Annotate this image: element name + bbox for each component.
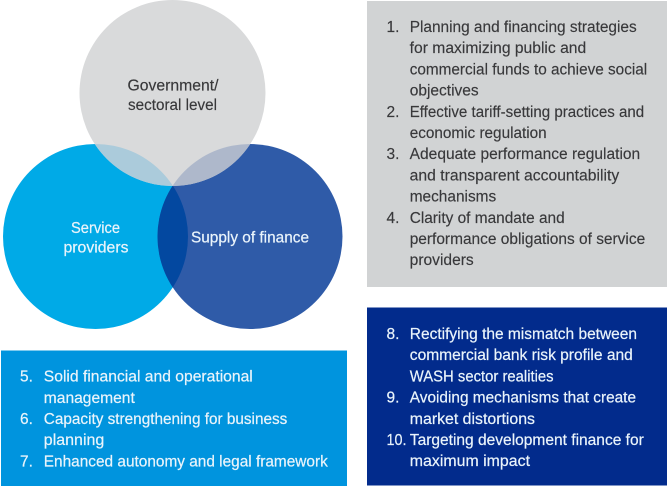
list: items 8 to 10: 10. [386,432,406,449]
list: items 8 to 10: Rectifying the mismatch between [410,326,637,343]
list: items 8 to 10: market distortions [410,411,535,428]
list: items 5 to 7: 5. [20,368,33,386]
panel: government actions [367,1,667,287]
list: items 1 to 4: Clarity of mandate and [410,210,565,227]
list: items 8 to 10: Avoiding mechanisms that create [410,390,636,407]
list: items 1 to 4: providers [410,252,474,269]
list: items 1 to 4: Adequate performance regulation [410,146,640,163]
list: items 8 to 10: Targeting development finance for [410,432,644,449]
label: government/sectoral level: Government/ [128,78,219,94]
list: items 8 to 10: 9. [386,390,399,407]
list: items 1 to 4: objectives [410,83,479,100]
list: items 8 to 10: WASH sector realities [410,368,554,385]
label: service providers: providers [64,240,129,256]
overlap: government and service providers [94,144,173,186]
list: items 5 to 7: Enhanced autonomy and legal framework [44,454,328,470]
list: items 1 to 4: 1. [386,19,399,36]
list: items 1 to 4: mechanisms [410,189,496,206]
circle: government/sectoral level [80,0,266,186]
panel background [367,308,667,486]
list: items 1 to 4: for maximizing public and [410,40,586,57]
panel: service provider actions [1,350,347,486]
label: government/sectoral level [128,78,219,114]
panel background [367,1,667,287]
list: items 1 to 4: economic regulation [410,125,547,142]
list: items 5 to 7: planning [44,432,104,449]
panel: supply of finance actions [367,308,667,486]
circle: supply of finance [158,144,342,329]
list: items 1 to 4: Effective tariff-setting practices and [410,104,644,121]
list: items 8 to 10: commercial bank risk profile and [410,347,633,364]
list: items 1 to 4 [386,19,647,269]
list: items 5 to 7: Solid financial and operational [44,368,253,386]
panel background [1,350,347,486]
overlap: government and supply of finance [172,144,250,186]
list: items 5 to 7: management [44,390,135,407]
list: items 5 to 7: 7. [20,454,33,470]
list: items 8 to 10 [386,326,644,470]
list: items 5 to 7: 6. [20,411,33,428]
list: items 8 to 10: maximum impact [410,453,531,470]
list: items 1 to 4: commercial funds to achieve social [410,61,647,78]
list: items 1 to 4: and transparent accountability [410,167,619,184]
label: government/sectoral level: sectoral level [128,97,217,114]
overlap: service providers and supply of finance [158,186,188,288]
label: supply of finance: Supply of finance [191,230,309,246]
circle: service providers [3,144,188,329]
list: items 1 to 4: 3. [386,146,399,163]
list: items 5 to 7 [20,368,328,470]
label: service providers: Service [71,220,120,237]
list: items 8 to 10: 8. [386,326,399,343]
list: items 1 to 4: Planning and financing strategies [410,19,637,36]
list: items 5 to 7: Capacity strengthening for business [44,411,288,428]
list: items 1 to 4: performance obligations of service [410,231,645,248]
venn diagram [3,0,342,329]
list: items 1 to 4: 4. [386,210,399,227]
label: service providers [64,220,129,256]
list: items 1 to 4: 2. [386,104,399,121]
